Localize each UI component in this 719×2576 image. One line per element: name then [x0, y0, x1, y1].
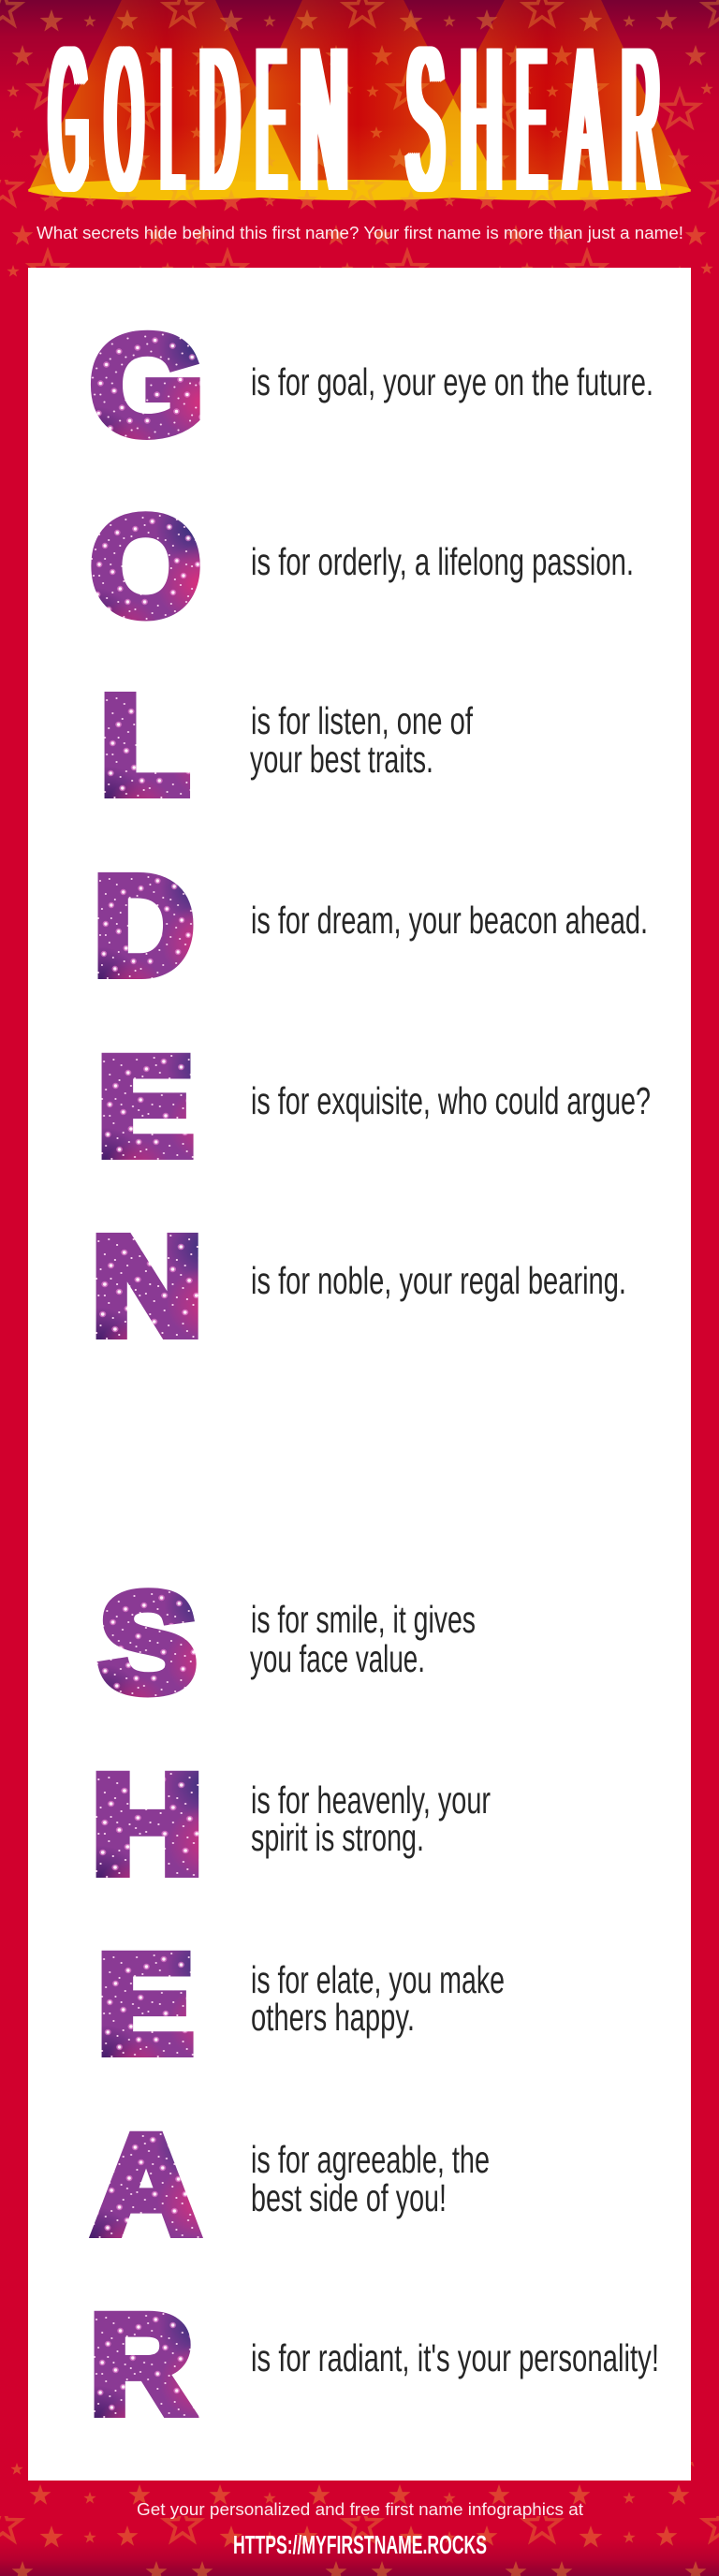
caption L: [250, 699, 473, 781]
caption S: [250, 1598, 476, 1680]
caption H: spirit is strong.: [251, 1816, 424, 1859]
caption A: [251, 2138, 490, 2219]
caption A: is for agreeable, the: [251, 2138, 490, 2181]
white panel: [28, 268, 691, 2481]
letter G: G: [90, 307, 204, 463]
title: [47, 4, 661, 234]
row: A: [93, 2106, 490, 2263]
caption S: you face value.: [250, 1637, 425, 1680]
row: E: [97, 1926, 505, 2083]
stars: bottom band: [0, 2462, 719, 2576]
caption S: is for smile, it gives: [251, 1598, 476, 1641]
caption E: is for elate, you make: [251, 1958, 505, 2001]
title: D: [200, 4, 239, 234]
row: S: [99, 1564, 476, 1721]
title: L: [161, 4, 183, 234]
letter D: D: [94, 847, 194, 1004]
title: O: [106, 4, 142, 234]
letter E: E: [97, 1926, 194, 2083]
row: E: [97, 1029, 651, 1185]
title: E: [257, 4, 286, 234]
caption A: best side of you!: [251, 2176, 447, 2219]
caption L: your best traits.: [250, 738, 433, 781]
caption H: is for heavenly, your: [251, 1778, 491, 1822]
title: S: [407, 4, 443, 234]
title: H: [462, 4, 502, 234]
letter R: R: [90, 2287, 193, 2443]
subtitle: What secrets hide behind this first name? Your first name is more than just a name!: [37, 223, 683, 242]
letter S: S: [99, 1564, 197, 1721]
footer url: HTTPS://MYFIRSTNAME.ROCKS: [233, 2530, 487, 2559]
footer line: Get your personalized and free first name infographics at: [137, 2499, 583, 2519]
row: L: [100, 666, 473, 824]
row: R: [90, 2287, 659, 2443]
caption H: [251, 1778, 491, 1859]
title: R: [623, 4, 659, 234]
title: E: [517, 4, 546, 234]
letter H: H: [92, 1747, 203, 1903]
caption E: others happy.: [251, 1996, 415, 2039]
row: O: [91, 488, 634, 644]
row: N: [92, 1208, 626, 1365]
letter O: O: [91, 488, 201, 644]
letter A: A: [93, 2106, 199, 2263]
caption E: [251, 1958, 505, 2039]
letter E: E: [97, 1029, 194, 1185]
letter L: L: [100, 666, 189, 824]
row: H: [92, 1747, 491, 1903]
spotlights: [28, 0, 691, 200]
row: D: [94, 847, 648, 1004]
title: N: [301, 4, 346, 234]
letter N: N: [92, 1208, 203, 1365]
caption L: is for listen, one of: [251, 699, 473, 742]
stars: top band: [0, 0, 719, 281]
title: A: [566, 4, 603, 234]
row: G: [90, 307, 653, 463]
title: G: [50, 4, 88, 234]
